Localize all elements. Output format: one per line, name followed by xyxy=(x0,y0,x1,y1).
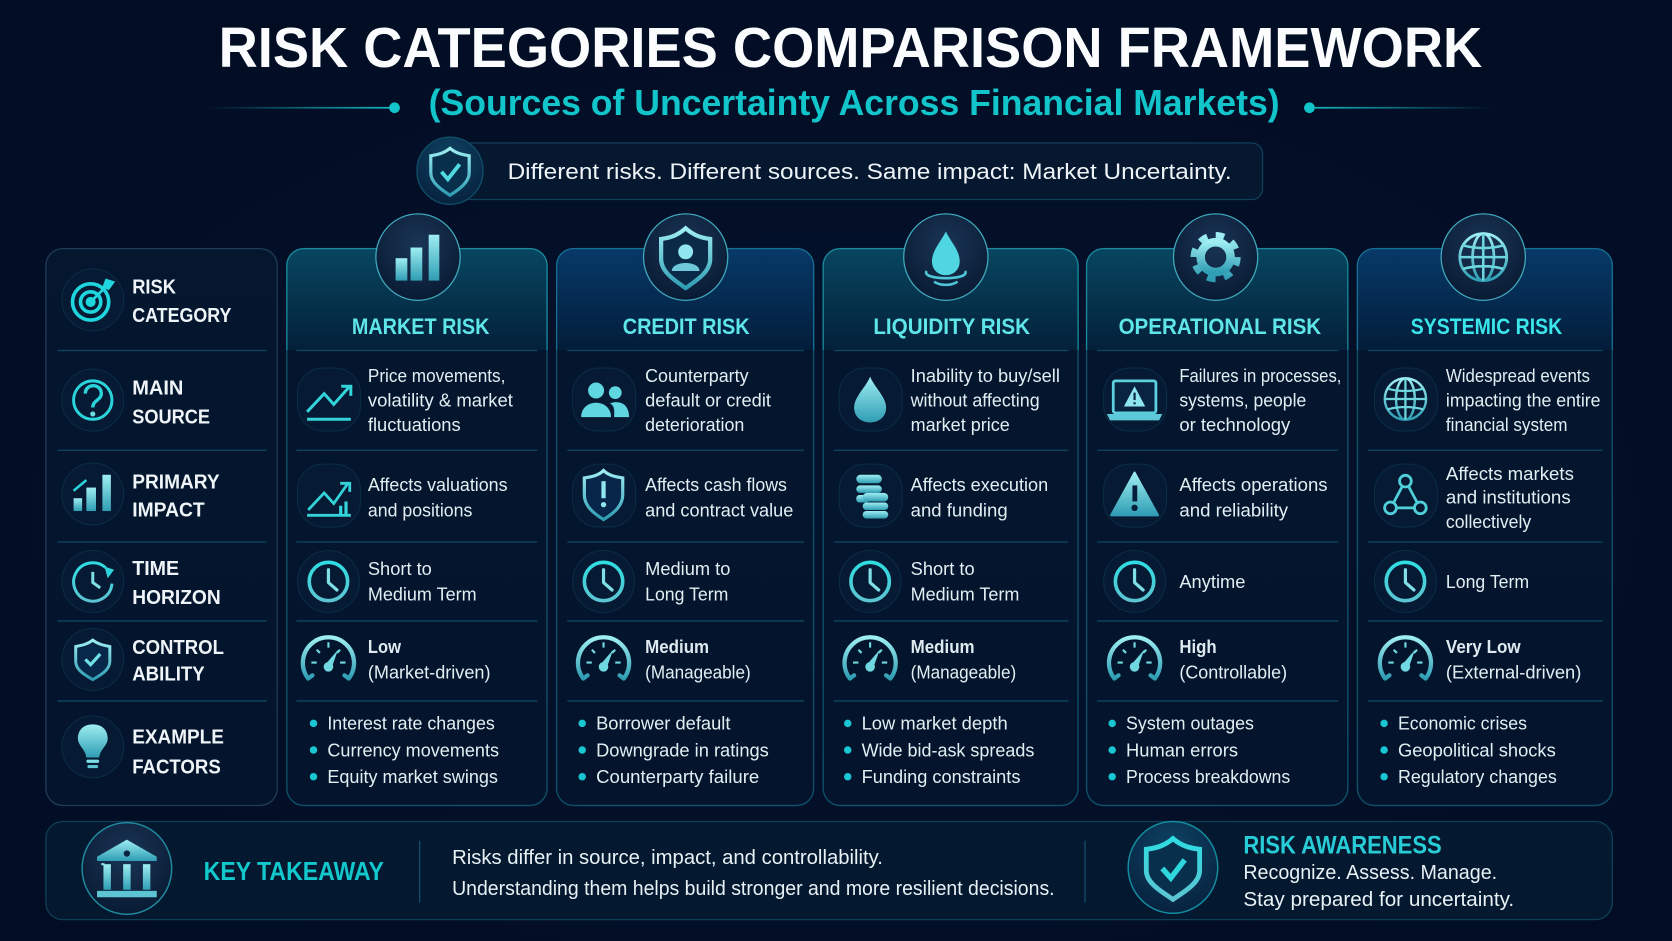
control ability: Very Low xyxy=(1446,637,1521,657)
example factors: System outages xyxy=(1126,714,1254,734)
risk awareness text: Stay prepared for uncertainty. xyxy=(1243,889,1514,911)
time horizon: Short to xyxy=(368,559,432,579)
control ability xyxy=(578,637,751,683)
time horizon xyxy=(1104,551,1245,612)
primary impact xyxy=(839,464,1048,527)
primary impact: collectively xyxy=(1446,512,1532,532)
main source: Widespread events xyxy=(1446,366,1590,386)
panel: key takeaway footer xyxy=(46,822,1612,920)
control ability: Medium xyxy=(645,637,709,657)
row label: time horizon: TIME xyxy=(132,558,179,580)
panel: systemic risk xyxy=(1357,214,1612,806)
control ability: Low xyxy=(368,637,402,657)
example factors: Interest rate changes xyxy=(327,714,495,734)
main source xyxy=(1104,366,1341,435)
icon: globe xyxy=(1441,214,1525,300)
title: RISK CATEGORIES COMPARISON FRAMEWORK xyxy=(219,16,1482,79)
panel: liquidity risk xyxy=(823,214,1078,806)
icon: bank xyxy=(82,823,172,914)
row label: control ability: ABILITY xyxy=(132,664,205,686)
takeaway text: Understanding them helps build stronger and more resilient decisions. xyxy=(452,878,1055,900)
icon: shield with person xyxy=(644,214,728,300)
panel: row labels xyxy=(46,249,277,806)
time horizon xyxy=(839,551,1019,612)
row label: control ability: CONTROL xyxy=(132,637,224,659)
primary impact: Affects valuations xyxy=(368,475,508,495)
primary impact: and reliability xyxy=(1179,500,1289,520)
time horizon xyxy=(298,551,477,612)
row label: main source xyxy=(62,369,210,431)
time horizon xyxy=(573,551,730,612)
icon: shield check xyxy=(417,137,483,204)
primary impact: Affects markets xyxy=(1446,464,1574,484)
control ability: (External-driven) xyxy=(1446,663,1581,683)
row label: risk category: CATEGORY xyxy=(132,305,232,327)
example factors xyxy=(310,714,499,787)
example factors: Geopolitical shocks xyxy=(1398,740,1556,760)
row label: primary impact: IMPACT xyxy=(132,499,205,521)
example factors: Downgrade in ratings xyxy=(596,740,769,760)
main source: Inability to buy/sell xyxy=(911,366,1060,386)
panel: market risk xyxy=(287,214,547,806)
tagline banner: Different risks. Different sources. Same impact: Market Uncertainty. xyxy=(508,159,1232,184)
main source xyxy=(839,366,1060,435)
row label: primary impact xyxy=(62,463,220,525)
main source: financial system xyxy=(1446,415,1567,435)
example factors xyxy=(1108,714,1290,787)
row label: risk category xyxy=(62,269,232,331)
example factors: Low market depth xyxy=(862,714,1008,734)
time horizon: Long Term xyxy=(645,585,728,605)
row label: example factors xyxy=(62,716,224,778)
takeaway text xyxy=(452,847,1055,900)
tagline banner xyxy=(417,137,1263,204)
main source: or technology xyxy=(1179,415,1291,435)
example factors: Regulatory changes xyxy=(1398,767,1557,787)
primary impact xyxy=(298,464,508,527)
control ability: (Controllable) xyxy=(1179,663,1287,683)
control ability xyxy=(303,637,491,683)
control ability xyxy=(1380,637,1581,683)
main source: Price movements, xyxy=(368,366,505,386)
primary impact xyxy=(1374,464,1574,532)
row label: primary impact: PRIMARY xyxy=(132,472,220,494)
row label: risk category: RISK xyxy=(132,276,176,298)
row label: control ability xyxy=(62,628,224,690)
example factors: Economic crises xyxy=(1398,714,1527,734)
control ability: Medium xyxy=(911,637,975,657)
heading: market risk: MARKET RISK xyxy=(352,314,489,339)
primary impact: and contract value xyxy=(645,500,793,520)
time horizon: Anytime xyxy=(1179,572,1245,592)
control ability xyxy=(1109,637,1287,683)
row label: time horizon xyxy=(62,551,221,612)
icon: bar chart xyxy=(376,214,460,300)
main source: Failures in processes, xyxy=(1179,366,1341,386)
example factors: Counterparty failure xyxy=(596,767,759,787)
primary impact xyxy=(1104,464,1328,527)
risk awareness text: RISK AWARENESS xyxy=(1243,833,1442,860)
subtitle xyxy=(208,82,1494,123)
heading: credit risk: CREDIT RISK xyxy=(623,314,750,339)
primary impact: and funding xyxy=(911,500,1008,520)
heading: operational risk: OPERATIONAL RISK xyxy=(1119,314,1321,339)
time horizon xyxy=(1374,551,1529,612)
example factors: Process breakdowns xyxy=(1126,767,1290,787)
heading: liquidity risk: LIQUIDITY RISK xyxy=(873,314,1030,339)
main source: market price xyxy=(911,415,1010,435)
icon: shield check xyxy=(1128,822,1218,913)
primary impact: Affects cash flows xyxy=(645,475,787,495)
time horizon: Long Term xyxy=(1446,572,1529,592)
main source: deterioration xyxy=(645,415,744,435)
row label: example factors: FACTORS xyxy=(132,756,221,778)
example factors xyxy=(578,714,769,787)
primary impact: Affects operations xyxy=(1179,475,1328,495)
risk awareness text xyxy=(1243,833,1514,911)
time horizon: Medium Term xyxy=(368,585,477,605)
example factors: Borrower default xyxy=(596,714,730,734)
row label: main source: SOURCE xyxy=(132,407,210,429)
main source: default or credit xyxy=(645,390,771,410)
risk awareness text: Recognize. Assess. Manage. xyxy=(1243,862,1497,884)
row label: example factors: EXAMPLE xyxy=(132,727,224,749)
main source: systems, people xyxy=(1179,390,1306,410)
time horizon: Short to xyxy=(911,559,975,579)
example factors: Funding constraints xyxy=(862,767,1020,787)
main source xyxy=(298,366,513,435)
primary impact: Affects execution xyxy=(911,475,1048,495)
example factors: Wide bid-ask spreads xyxy=(862,740,1034,760)
control ability: (Manageable) xyxy=(645,663,751,683)
main source: Counterparty xyxy=(645,366,749,386)
main source xyxy=(1374,366,1601,435)
main source: volatility & market xyxy=(368,390,513,410)
main source xyxy=(573,366,771,435)
example factors: Equity market swings xyxy=(327,767,498,787)
control ability: (Manageable) xyxy=(911,663,1016,683)
example factors: Currency movements xyxy=(327,740,499,760)
control ability xyxy=(845,637,1016,683)
example factors xyxy=(1380,714,1557,787)
primary impact xyxy=(573,464,793,527)
main source: without affecting xyxy=(910,390,1040,410)
example factors: Human errors xyxy=(1126,740,1238,760)
subtitle: (Sources of Uncertainty Across Financial Markets) xyxy=(429,82,1280,123)
panel: operational risk xyxy=(1087,214,1348,806)
heading: systemic risk: SYSTEMIC RISK xyxy=(1411,314,1562,339)
main source: fluctuations xyxy=(368,415,461,435)
row label: time horizon: HORIZON xyxy=(132,587,221,609)
panel: credit risk xyxy=(557,214,814,806)
takeaway text: Risks differ in source, impact, and controllability. xyxy=(452,847,883,869)
main source: impacting the entire xyxy=(1446,390,1601,410)
icon: water drop with ripples xyxy=(904,214,988,300)
time horizon: Medium to xyxy=(645,559,730,579)
icon: gear xyxy=(1173,214,1258,300)
primary impact: and positions xyxy=(368,500,472,520)
time horizon: Medium Term xyxy=(911,585,1019,605)
primary impact: and institutions xyxy=(1446,488,1571,508)
example factors xyxy=(844,714,1034,787)
control ability: (Market-driven) xyxy=(368,663,491,683)
row label: main source: MAIN xyxy=(132,378,183,400)
heading: key takeaway: KEY TAKEAWAY xyxy=(204,858,384,886)
control ability: High xyxy=(1179,637,1217,657)
